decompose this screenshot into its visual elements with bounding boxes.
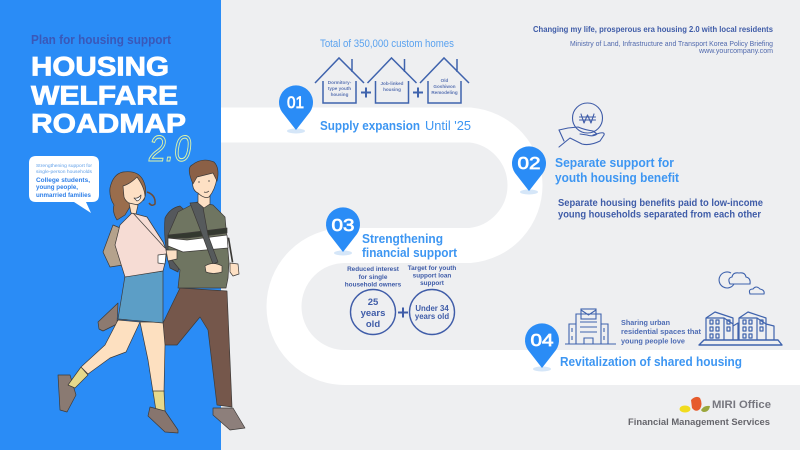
callout: speech bubble: young people, (36, 184, 78, 191)
icon: office building (565, 309, 616, 344)
step 04 caption: young people love (621, 336, 685, 346)
version mark 2.0: 2.0 (148, 128, 191, 169)
icon: clouds (719, 272, 764, 294)
circle: under 34 years old (410, 290, 454, 334)
subtitle: Plan for housing support (31, 32, 172, 47)
circle: under 34 years old: years old (415, 312, 449, 321)
plus sign (398, 308, 408, 318)
title: WELFARE (31, 80, 178, 110)
footer company line: Financial Management Services (628, 417, 770, 427)
step 03 captions: Target for youth (408, 265, 456, 272)
icon: hand holding won coin (559, 103, 604, 147)
step 02 description: young households separated from each other (558, 210, 761, 220)
pin 03 (326, 207, 360, 256)
step 04 caption: Sharing urban (621, 318, 670, 327)
circle: 25 years old: old (366, 319, 380, 330)
house three: Remodeling (431, 90, 458, 95)
step 04 title: Revitalization of shared housing (560, 354, 742, 369)
header text block: www.yourcompany.com (698, 46, 773, 55)
step 01 heading note: Total of 350,000 custom homes (320, 38, 454, 50)
pin 04: 04 (530, 330, 554, 350)
house two (368, 58, 416, 103)
step 03 captions: support loan (413, 272, 451, 280)
icon: three houses (315, 58, 469, 103)
house three (420, 58, 469, 103)
callout: speech bubble: Strengthening support for (36, 163, 93, 168)
pin 04 (525, 323, 559, 372)
house one: Dormitory- (328, 80, 352, 85)
step 03 captions: household owners (345, 282, 402, 288)
step 03 title: financial support (362, 245, 458, 260)
pin 01 (279, 85, 313, 134)
title: HOUSING (31, 52, 169, 82)
callout: speech bubble: College students, (36, 177, 90, 184)
pin 01: 01 (287, 93, 304, 112)
circle: 25 years old (350, 290, 396, 334)
step 02 description: Separate housing benefits paid to low-income (558, 198, 763, 209)
logo: MIRI Office (680, 397, 771, 412)
pin 03: 03 (332, 215, 354, 235)
house three: Goshiwon (433, 84, 456, 89)
step 02 description (558, 198, 763, 220)
logo: MIRI Office: MIRI Office (712, 399, 771, 411)
title: ROADMAP (31, 108, 186, 138)
header text block: Ministry of Land, Infrastructure and Transport Korea Policy Briefing (570, 39, 773, 48)
pin 02: 02 (518, 153, 540, 173)
pin 02 (512, 146, 546, 194)
step 03 captions (345, 265, 456, 288)
step 02 title: youth housing benefit (555, 170, 680, 185)
illustration: man (98, 160, 245, 430)
circle: 25 years old: years (361, 308, 385, 319)
circle: under 34 years old: Under 34 (415, 304, 449, 313)
step 01 title: Supply expansion (320, 119, 420, 133)
house three: Old (441, 78, 449, 83)
plus sign one (361, 88, 371, 98)
step 03 captions: support (420, 280, 445, 287)
house one (315, 58, 364, 103)
step 03 title (362, 231, 458, 260)
callout: speech bubble: single-person households (36, 169, 93, 174)
step 03 title: Strengthening (362, 231, 443, 246)
callout: speech bubble: unmarried families (36, 192, 92, 199)
illustration: woman (58, 172, 178, 433)
step 02 title (555, 155, 680, 185)
title (31, 52, 186, 138)
step 04 caption: residential spaces that (621, 327, 702, 336)
circle: 25 years old: 25 (368, 297, 379, 308)
header text block (533, 24, 773, 55)
header text block: Changing my life, prosperous era housing 2.0 with local residents (533, 24, 773, 34)
house one: type youth (328, 86, 351, 91)
step 01 title: Until '25 (425, 119, 471, 133)
callout: speech bubble (29, 156, 99, 213)
step 04 caption (621, 318, 702, 346)
step 02 title: Separate support for (555, 155, 674, 170)
house two: housing (383, 87, 401, 92)
house one: housing (331, 92, 349, 97)
icon: apartment blocks (699, 312, 782, 345)
panel: blue left column (0, 0, 221, 450)
winding white road (220, 125, 800, 368)
step 03 captions: Reduced interest (347, 266, 400, 273)
house two: Job-linked (381, 81, 404, 86)
plus sign two (413, 88, 423, 98)
step 03 captions: for single (359, 274, 388, 281)
